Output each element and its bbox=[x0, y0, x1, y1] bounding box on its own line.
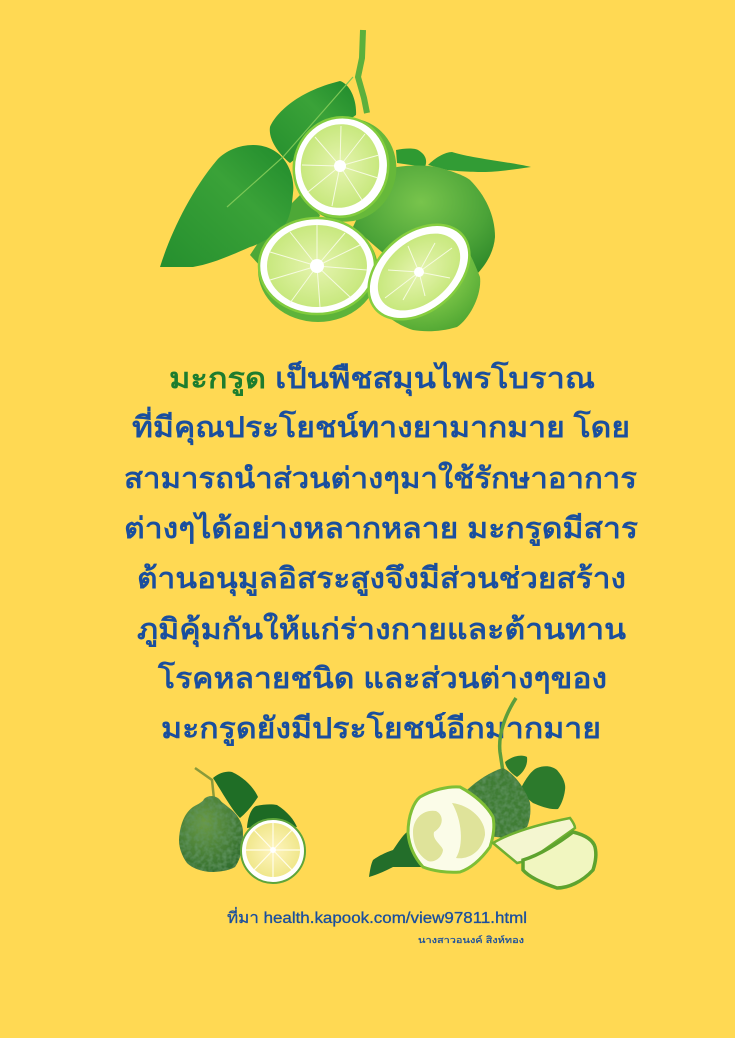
upper leaf bbox=[270, 81, 356, 163]
leaf lower bbox=[247, 804, 297, 828]
top leaf bbox=[505, 756, 527, 777]
author: นางสาวอนงค์ สิงห์ทอง bbox=[418, 934, 524, 945]
cut slice top bbox=[283, 104, 411, 236]
stem bbox=[358, 30, 367, 113]
small right leaf bbox=[396, 148, 426, 167]
half fruit bbox=[408, 787, 494, 872]
leaf bbox=[213, 772, 258, 818]
illustration: bottom right bergamot bbox=[369, 698, 596, 888]
hidden fruit bbox=[250, 195, 320, 268]
source line: ที่มา health.kapook.com/view97811.html bbox=[227, 907, 527, 927]
line 3: สามารถนำส่วนต่างๆมาใช้รักษาอาการ bbox=[124, 461, 637, 495]
line 7: โรคหลายชนิด และส่วนต่างๆของ bbox=[158, 661, 607, 695]
back fruit bbox=[467, 768, 530, 838]
line 5: ต้านอนุมูลอิสระสูงจึงมีส่วนช่วยสร้าง bbox=[137, 563, 626, 596]
whole fruit bbox=[179, 796, 243, 872]
stem bbox=[195, 768, 214, 799]
main text bbox=[124, 360, 638, 746]
line 4: ต่างๆได้อย่างหลากหลาย มะกรูดมีสาร bbox=[124, 511, 638, 546]
cut fruit bbox=[241, 819, 305, 883]
illustration: top bergamot group bbox=[160, 30, 531, 339]
back wedge bbox=[493, 818, 575, 863]
stem bbox=[500, 698, 516, 772]
front wedge bbox=[523, 832, 596, 888]
cut slice bottom left bbox=[258, 218, 378, 322]
right leaf bbox=[520, 766, 565, 809]
cut slice bottom right bbox=[350, 205, 488, 339]
line 2: ที่มีคุณประโยชน์ทางยามากมาย โดย bbox=[132, 407, 630, 445]
lower leaves bbox=[369, 832, 422, 877]
line 6: ภูมิคุ้มกันให้แก่ร่างกายและต้านทาน bbox=[137, 612, 626, 647]
illustration: bottom left bergamot bbox=[179, 768, 305, 883]
leaf vein bbox=[227, 77, 353, 207]
line 1: มะกรูด เป็นพืชสมุนไพรโบราณ bbox=[169, 360, 595, 396]
long right leaf bbox=[428, 152, 531, 172]
back fruit bbox=[353, 166, 495, 280]
line 8: มะกรูดยังมีประโยชน์อีกมากมาย bbox=[161, 711, 601, 746]
left leaf bbox=[160, 145, 293, 267]
